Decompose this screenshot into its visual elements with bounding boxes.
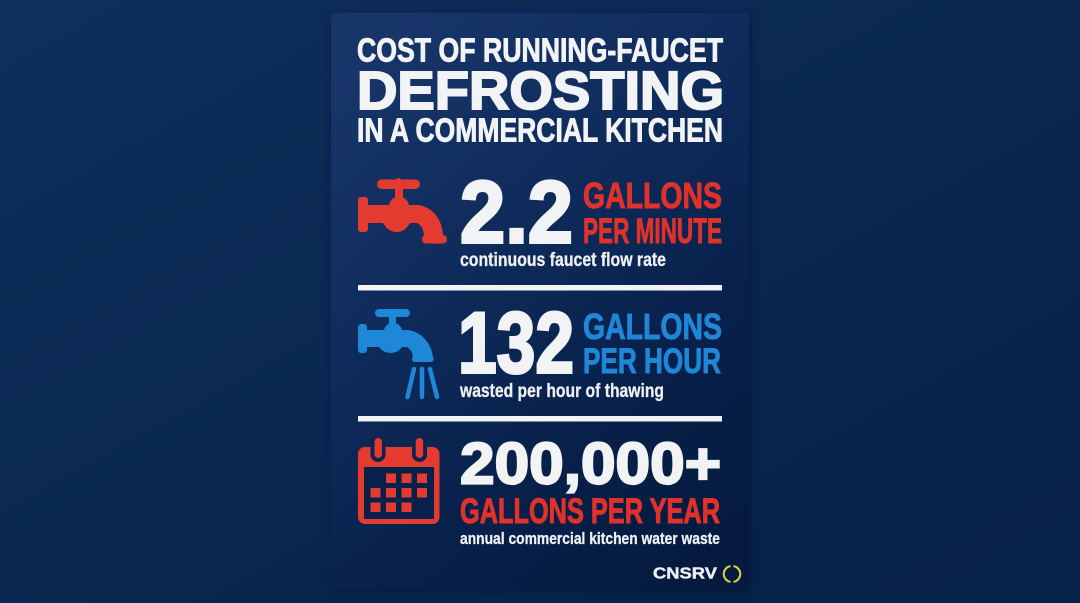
stat value: 200,000+: 200,000+ xyxy=(460,432,721,496)
logo: CNSRV xyxy=(653,566,740,582)
stat value: 132: 132 xyxy=(458,296,574,392)
title: IN A COMMERCIAL KITCHEN xyxy=(357,112,723,148)
panel: poster background xyxy=(331,13,749,590)
poster xyxy=(331,13,752,593)
icon: red calendar xyxy=(358,436,440,524)
icon: blue faucet with running water xyxy=(358,309,437,397)
title: DEFROSTING xyxy=(357,61,724,121)
caption: continuous faucet flow rate xyxy=(460,250,666,271)
stat unit: gallons per minute xyxy=(583,175,722,251)
icon: red faucet xyxy=(358,178,447,244)
stat row: gallons per minute xyxy=(358,162,722,271)
stat unit: gallons per minute: GALLONS xyxy=(583,175,722,216)
stat unit: gallons per hour xyxy=(583,306,722,381)
title xyxy=(357,32,724,148)
stat unit: gallons per hour: GALLONS xyxy=(583,306,722,347)
stat value: 2.2: 2.2 xyxy=(460,162,573,262)
title: COST OF RUNNING-FAUCET xyxy=(357,32,723,68)
logo: CNSRV: CNSRV xyxy=(653,566,717,582)
stat unit: gallons per hour: PER HOUR xyxy=(583,342,721,381)
stat unit: gallons per year: GALLONS PER YEAR xyxy=(460,492,720,531)
stat row: gallons per hour xyxy=(358,296,722,402)
stat row: gallons per year xyxy=(358,432,721,548)
caption: wasted per hour of thawing xyxy=(459,381,664,402)
caption: annual commercial kitchen water waste xyxy=(460,529,720,548)
stat unit: gallons per minute: PER MINUTE xyxy=(583,212,722,251)
